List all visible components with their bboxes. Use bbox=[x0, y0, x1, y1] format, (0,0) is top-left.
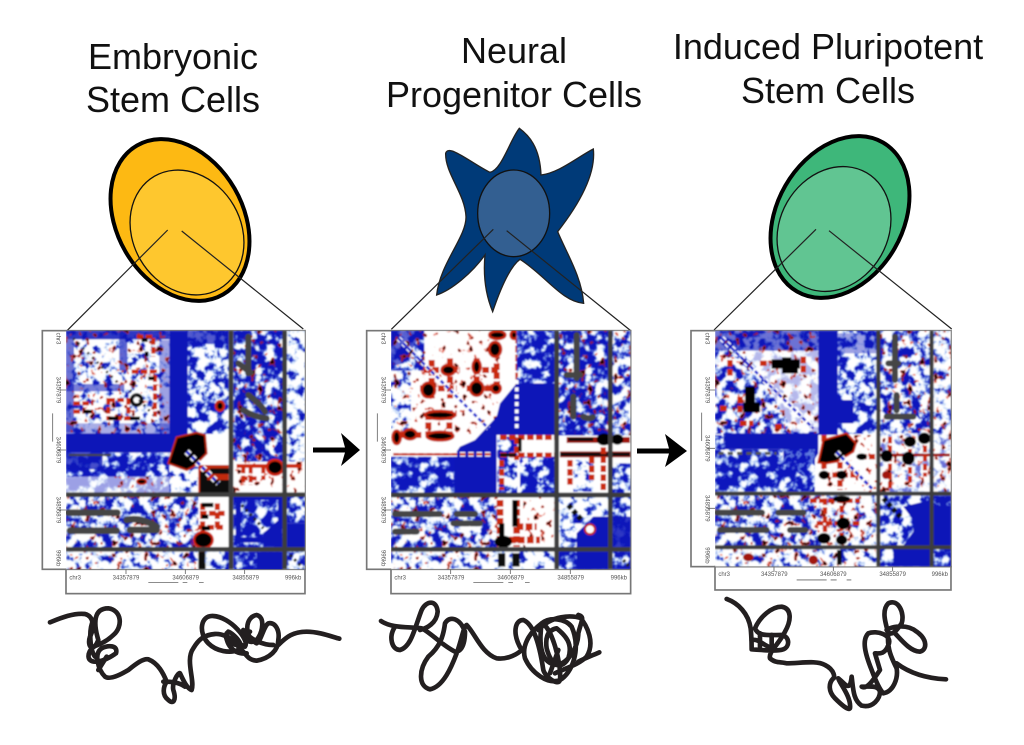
title: embryonic stem cells: Stem Cells bbox=[86, 79, 260, 120]
heatmap: neural progenitor cells: 34855879 bbox=[379, 497, 385, 524]
title: induced pluripotent stem cells: Stem Cells bbox=[741, 70, 915, 111]
heatmap: induced pluripotent stem cells: 34855879 bbox=[703, 495, 709, 522]
heatmap: neural progenitor cells: chr3 bbox=[394, 575, 407, 581]
heatmap: induced pluripotent stem cells: chr3 bbox=[703, 333, 709, 345]
icon: induced pluripotent stem cell bbox=[714, 111, 952, 330]
title: neural progenitor cells: Neural bbox=[461, 30, 567, 71]
heatmap: induced pluripotent stem cells: 34357879 bbox=[703, 377, 709, 404]
heatmap: neural progenitor cells: 34357879 bbox=[379, 377, 385, 404]
heatmap: induced pluripotent stem cells: 34606879 bbox=[703, 435, 709, 462]
icon: embryonic stem cell bbox=[66, 114, 303, 332]
heatmap: embryonic stem cells: 34606879 bbox=[55, 437, 61, 464]
heatmap: neural progenitor cells: 996kb bbox=[379, 550, 385, 567]
heatmap: embryonic stem cells: 34606879 bbox=[172, 575, 200, 581]
heatmap: neural progenitor cells: 34855879 bbox=[557, 575, 585, 581]
heatmap: neural progenitor cells bbox=[367, 331, 631, 594]
title: embryonic stem cells bbox=[86, 36, 260, 120]
title: neural progenitor cells: Progenitor Cells bbox=[386, 74, 642, 115]
icon: neural progenitor cell bbox=[391, 128, 631, 331]
heatmap: induced pluripotent stem cells: 996kb bbox=[932, 572, 949, 578]
heatmap: neural progenitor cells: chr3 bbox=[379, 333, 385, 345]
heatmap: embryonic stem cells: 34357879 bbox=[113, 575, 140, 581]
heatmap: embryonic stem cells: 34357879 bbox=[55, 377, 61, 404]
heatmap: neural progenitor cells: 34606879 bbox=[379, 437, 385, 464]
chromatin strand: neural bbox=[381, 603, 599, 689]
title: induced pluripotent stem cells: Induced Pluripotent bbox=[673, 26, 983, 67]
title: induced pluripotent stem cells bbox=[673, 26, 983, 111]
heatmap: induced pluripotent stem cells: 996kb bbox=[703, 547, 709, 564]
heatmap: embryonic stem cells: 34855879 bbox=[55, 497, 61, 524]
arrow: embryonic to neural bbox=[313, 433, 360, 466]
chromatin strand: induced pluripotent bbox=[727, 599, 946, 709]
chromatin strand: embryonic bbox=[50, 608, 339, 702]
heatmap: embryonic stem cells: 996kb bbox=[55, 550, 61, 567]
heatmap: induced pluripotent stem cells: 34855879 bbox=[879, 572, 907, 578]
heatmap: neural progenitor cells: 34606879 bbox=[497, 575, 525, 581]
heatmap: embryonic stem cells bbox=[42, 331, 305, 594]
heatmap: induced pluripotent stem cells: 34357879 bbox=[761, 572, 788, 578]
title: embryonic stem cells: Embryonic bbox=[88, 36, 258, 77]
title: neural progenitor cells bbox=[386, 30, 642, 115]
arrow: neural to induced bbox=[637, 434, 687, 467]
heatmap: neural progenitor cells: 996kb bbox=[611, 575, 628, 581]
heatmap: induced pluripotent stem cells bbox=[691, 331, 951, 590]
heatmap: embryonic stem cells: 996kb bbox=[285, 575, 302, 581]
heatmap: induced pluripotent stem cells: 34606879 bbox=[820, 572, 847, 578]
heatmap: induced pluripotent stem cells: chr3 bbox=[718, 572, 731, 578]
heatmap: neural progenitor cells: 34357879 bbox=[438, 575, 465, 581]
heatmap: embryonic stem cells: chr3 bbox=[69, 575, 82, 581]
heatmap: embryonic stem cells: chr3 bbox=[55, 333, 61, 345]
heatmap: embryonic stem cells: 34855879 bbox=[232, 575, 260, 581]
